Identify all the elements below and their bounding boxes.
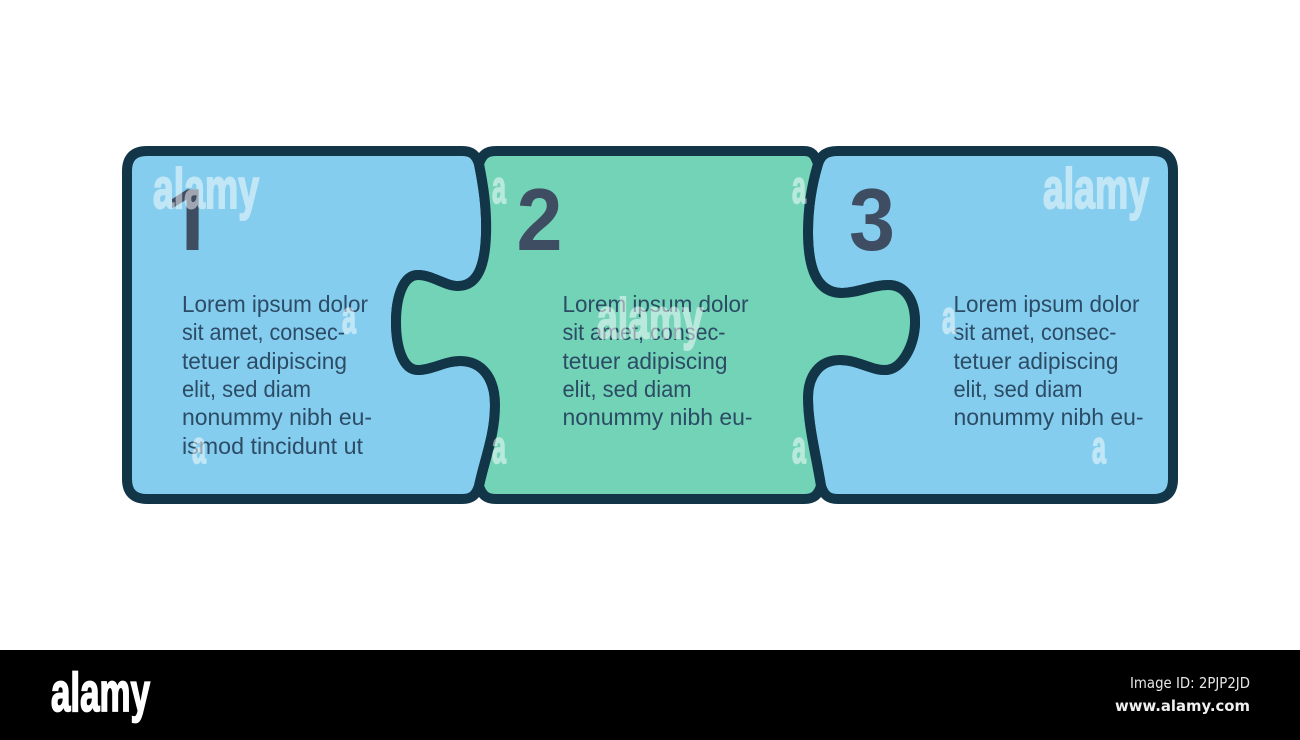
watermark overlay: a — [342, 291, 356, 343]
footer url: www.alamy.com — [1115, 697, 1250, 715]
watermark overlay: a — [942, 291, 956, 343]
watermark overlay: a — [1092, 421, 1106, 473]
text block: panel 1: nonummy nibh eu- — [182, 404, 372, 430]
watermark overlay: a — [792, 161, 806, 213]
text block: panel 3: tetuer adipiscing — [954, 348, 1118, 374]
watermark overlay: a — [492, 421, 506, 473]
watermark overlay: a — [792, 421, 806, 473]
text block: panel 2: Lorem ipsum dolor — [562, 291, 749, 317]
footer logo: alamy — [51, 661, 150, 723]
panel: puzzle piece 1 — [127, 151, 495, 499]
text block: panel 2: tetuer adipiscing — [562, 348, 728, 374]
footer image id: Image ID: 2PJP2JD — [1130, 674, 1250, 692]
text block: panel 3: sit amet, consec- — [954, 319, 1116, 345]
watermark overlay: alamy — [1043, 157, 1149, 221]
number 3: 3 — [849, 170, 895, 269]
watermark overlay: a — [492, 161, 506, 213]
watermark overlay: alamy — [597, 287, 703, 351]
text block: panel 3: nonummy nibh eu- — [954, 404, 1144, 430]
number 1: 1 — [166, 170, 215, 269]
text block: panel 2: sit amet, consec- — [562, 319, 726, 345]
number 2: 2 — [516, 170, 562, 269]
footer bar — [0, 650, 1300, 740]
text block: panel 1: tetuer adipiscing — [182, 348, 347, 374]
text block: panel 1: elit, sed diam — [182, 376, 311, 402]
text block: panel 2 — [562, 291, 752, 430]
watermark overlay — [153, 157, 1149, 473]
text block: panel 1: ismod tincidunt ut — [182, 433, 364, 459]
text block: panel 3: elit, sed diam — [954, 376, 1082, 402]
text block: panel 1 — [182, 291, 372, 459]
text block: panel 1: sit amet, consec- — [182, 319, 345, 345]
panel: puzzle piece 3 — [808, 151, 1173, 499]
text block: panel 2: elit, sed diam — [562, 376, 692, 402]
text block: panel 3: Lorem ipsum dolor — [954, 291, 1140, 317]
watermark overlay: a — [192, 421, 206, 473]
text block: panel 2: nonummy nibh eu- — [562, 404, 752, 430]
text block: panel 3 — [954, 291, 1144, 430]
watermark overlay: alamy — [153, 157, 259, 221]
panel: puzzle piece 2 — [396, 151, 915, 499]
text block: panel 1: Lorem ipsum dolor — [182, 291, 368, 317]
